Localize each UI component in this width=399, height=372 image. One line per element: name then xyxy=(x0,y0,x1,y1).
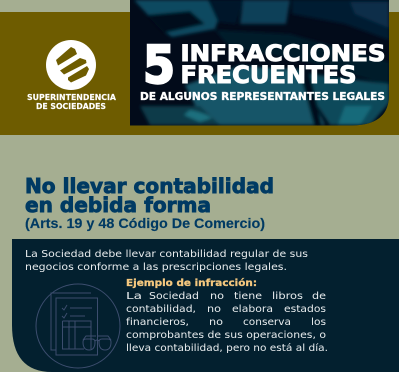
example text: financieros, xyxy=(126,317,189,328)
example text: Sociedad xyxy=(149,291,199,302)
logo: Superintendencia de Sociedades xyxy=(27,40,116,111)
example text: comprobantes de sus operaciones, o xyxy=(126,330,326,341)
main heading: 5 infracciones frecuentes xyxy=(140,36,386,103)
example text: elabora xyxy=(232,304,273,315)
example text: estados xyxy=(284,304,326,315)
example heading: Ejemplo de infracción: xyxy=(126,277,257,289)
main heading: 5 infracciones frecuentes: DE ALGUNOS REPRESENTANTES LEGALES xyxy=(140,91,385,103)
example text: no xyxy=(207,304,221,315)
header photo xyxy=(130,0,389,126)
logo: Superintendencia de Sociedades: SUPERINTENDENCIA xyxy=(27,93,116,102)
example text: tiene xyxy=(234,291,262,302)
example text: lleva contabilidad, pero no está al día. xyxy=(126,342,328,354)
intro text xyxy=(25,249,308,273)
main heading: 5 infracciones frecuentes: 5 xyxy=(143,36,175,96)
section title: en debida forma xyxy=(25,193,211,217)
intro text: La Sociedad debe llevar contabilidad regular de sus xyxy=(25,249,308,260)
section title: (Arts. 19 y 48 Código De Comercio) xyxy=(25,215,265,231)
dark panel xyxy=(12,239,399,372)
main heading: 5 infracciones frecuentes: INFRACCIONES xyxy=(180,41,386,67)
header band xyxy=(0,12,399,135)
example text: los xyxy=(311,317,326,328)
example text: contabilidad, xyxy=(126,304,196,315)
example text: libros xyxy=(272,291,303,302)
example text: conserva xyxy=(243,317,291,328)
example text: no xyxy=(210,291,224,302)
example text: de xyxy=(312,291,326,302)
example text xyxy=(126,291,328,354)
icon: documents and glasses xyxy=(36,284,120,368)
section title: No llevar contabilidad xyxy=(25,174,274,198)
logo: Superintendencia de Sociedades: DE SOCIEDADES xyxy=(36,102,106,111)
example text: no xyxy=(209,317,223,328)
section title xyxy=(25,174,274,231)
intro text: negocios conforme a las prescripciones legales. xyxy=(25,262,287,273)
main heading: 5 infracciones frecuentes: FRECUENTES xyxy=(180,61,356,89)
example text: La xyxy=(126,291,142,302)
